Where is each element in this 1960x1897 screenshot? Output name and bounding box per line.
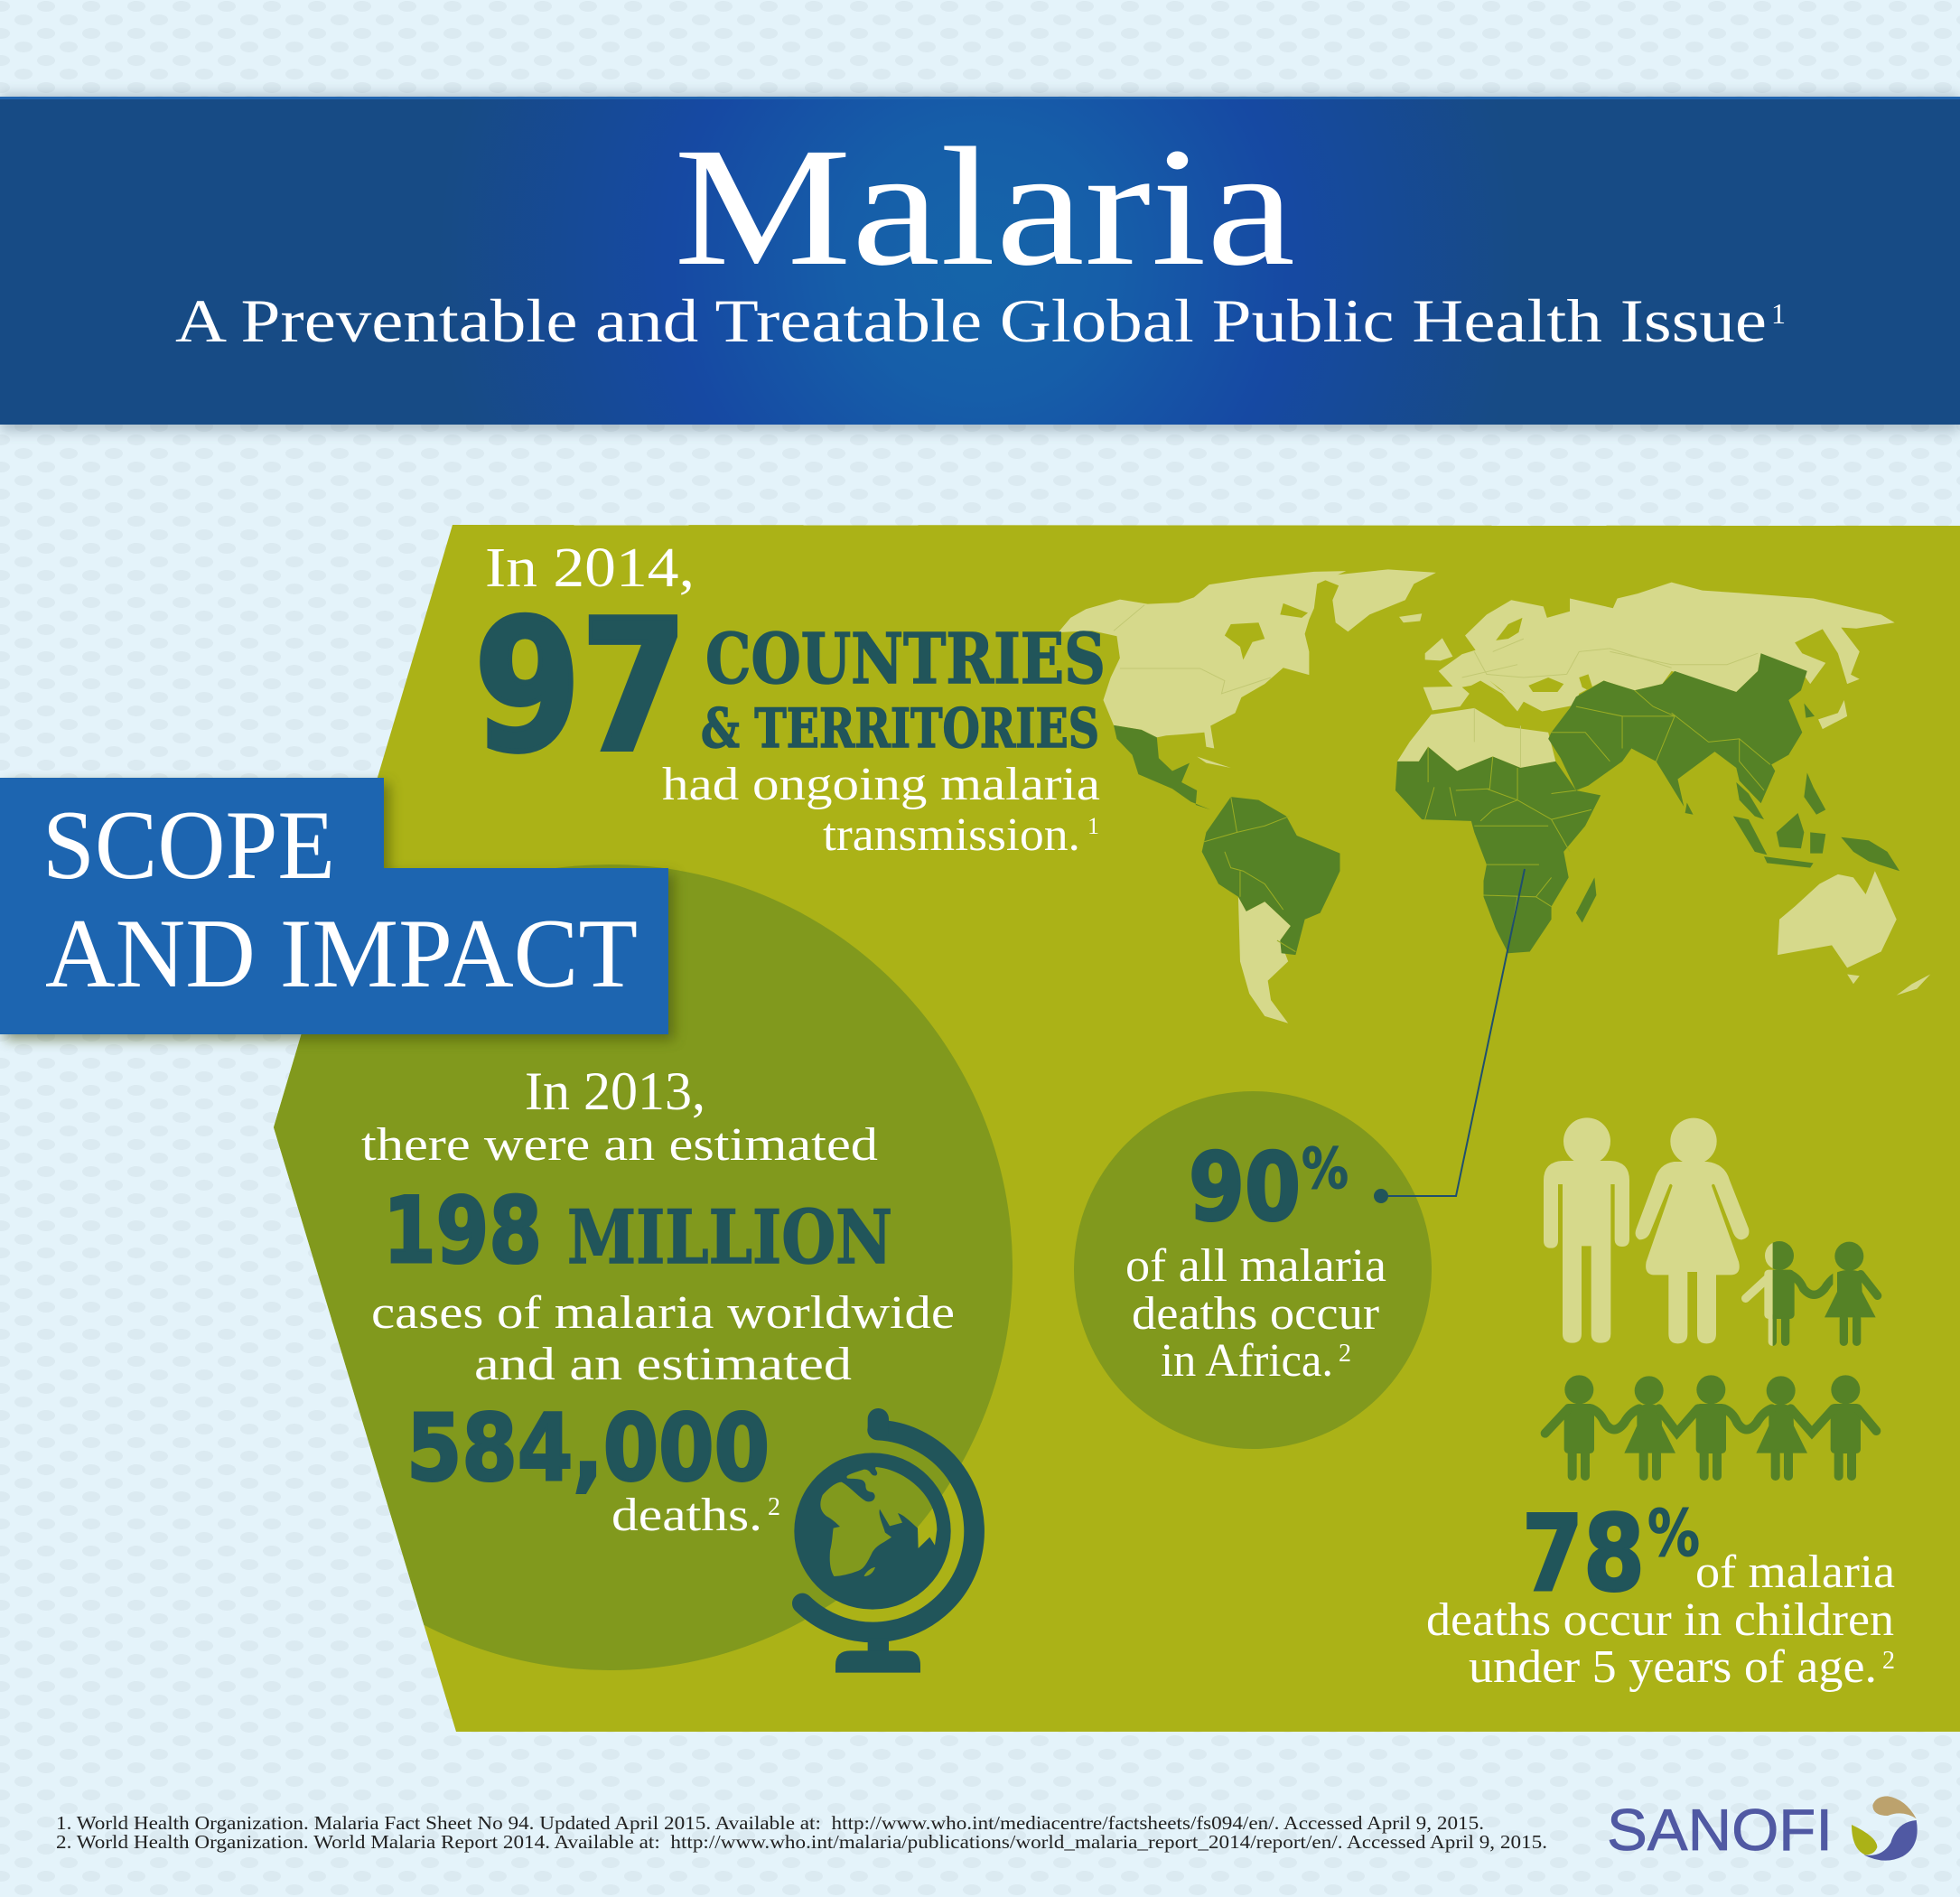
map: malaria-endemic land: [1114, 653, 1899, 955]
text block: 97 countries: transmission.: [823, 809, 1080, 861]
figure: woman: [1636, 1118, 1749, 1343]
map: non-endemic land: [1059, 569, 1930, 1023]
text block: 198 million cases: [361, 1061, 955, 1541]
footnotes: 2. World Health Organization. World Malaria Report 2014. Available at: http://www.who.int/malaria/publications/world_malaria_report_2014/report/en/. Accessed April 9, 2015.: [56, 1831, 1547, 1853]
map: seas and bays: [1225, 603, 1594, 694]
text block: 78 percent: deaths occur in children: [1426, 1594, 1894, 1646]
figure: girl: [1825, 1242, 1878, 1341]
text block: 78 percent: 78: [1522, 1493, 1645, 1615]
text block: 198 million cases: deaths.: [611, 1490, 762, 1541]
large dark circle: [207, 864, 1013, 1670]
text block: 78 percent: under 5 years of age.: [1469, 1641, 1877, 1693]
icon: family figures: [1544, 1117, 1878, 1476]
title banner: [0, 94, 1960, 432]
text block: 90 percent: in Africa.: [1161, 1335, 1333, 1387]
text block: 90 percent: of all malaria: [1125, 1240, 1386, 1292]
text block: 90 percent: 2: [1339, 1340, 1351, 1368]
text block: 198 million cases: 2: [768, 1493, 780, 1521]
logo: Sanofi: SANOFI: [1607, 1797, 1833, 1863]
world map: [1059, 569, 1930, 1023]
text block: 198 million cases: and an estimated: [474, 1339, 852, 1390]
subtitle reference: 1: [1771, 297, 1786, 330]
footnotes: 1. World Health Organization. Malaria Fact Sheet No 94. Updated April 2015. Available at: http://www.who.int/mediacentre/factsheets/fs094/en/. Accessed April 9, 2015.: [56, 1812, 1484, 1834]
number 584,000: 584,000: [406, 1395, 770, 1502]
figure: half-dark child: [1772, 1241, 1834, 1346]
text block: 78 percent: [1426, 1493, 1895, 1693]
logo mark: [1852, 1796, 1918, 1861]
logo: Sanofi: [1607, 1796, 1918, 1863]
row of five children: [1545, 1375, 1876, 1476]
heading line 2: AND IMPACT: [45, 899, 638, 1008]
text block: 198 million cases: In 2013,: [525, 1061, 705, 1121]
small dark circle: [1074, 1091, 1432, 1449]
text block: 97 countries: 1: [1087, 813, 1099, 839]
section label: scope and impact: [0, 778, 674, 1040]
countries: COUNTRIES: [705, 619, 1106, 700]
text block: 90 percent: [1125, 1134, 1386, 1387]
icon: globe: [794, 1408, 975, 1673]
panel: green hexagon: [207, 525, 1960, 1732]
territories: & TERRITORIES: [701, 697, 1099, 761]
subtitle: A Preventable and Treatable Global Public Health Issue: [175, 286, 1767, 355]
number 198: 198: [383, 1177, 542, 1284]
text block: 90 percent: %: [1302, 1135, 1349, 1201]
text block: 198 million cases: there were an estimated: [361, 1119, 878, 1171]
text block: 97 countries: [474, 537, 1106, 861]
text block: 97 countries: In 2014,: [485, 537, 695, 599]
transmission text: had ongoing malaria: [662, 759, 1100, 810]
text block: 78 percent: 2: [1882, 1647, 1895, 1675]
leader dot: [1374, 1189, 1388, 1203]
text block: 90 percent: deaths occur: [1132, 1288, 1379, 1340]
figure: man: [1544, 1117, 1629, 1343]
big number 97: 97: [474, 582, 687, 792]
leader line to Africa: [1381, 869, 1525, 1196]
figure: half-light child: [1741, 1243, 1773, 1346]
heading line 1: SCOPE: [42, 790, 335, 900]
map: country borders: [1203, 690, 1770, 952]
million: MILLION: [567, 1195, 892, 1281]
text block: 78 percent: %: [1647, 1496, 1700, 1571]
text block: 78 percent: of malaria: [1695, 1547, 1895, 1598]
footnotes: [56, 1812, 1547, 1853]
text block: 198 million cases: cases of malaria worldwide: [371, 1287, 955, 1339]
title: Malaria: [674, 112, 1295, 301]
text block: 90 percent: 90: [1189, 1134, 1301, 1242]
